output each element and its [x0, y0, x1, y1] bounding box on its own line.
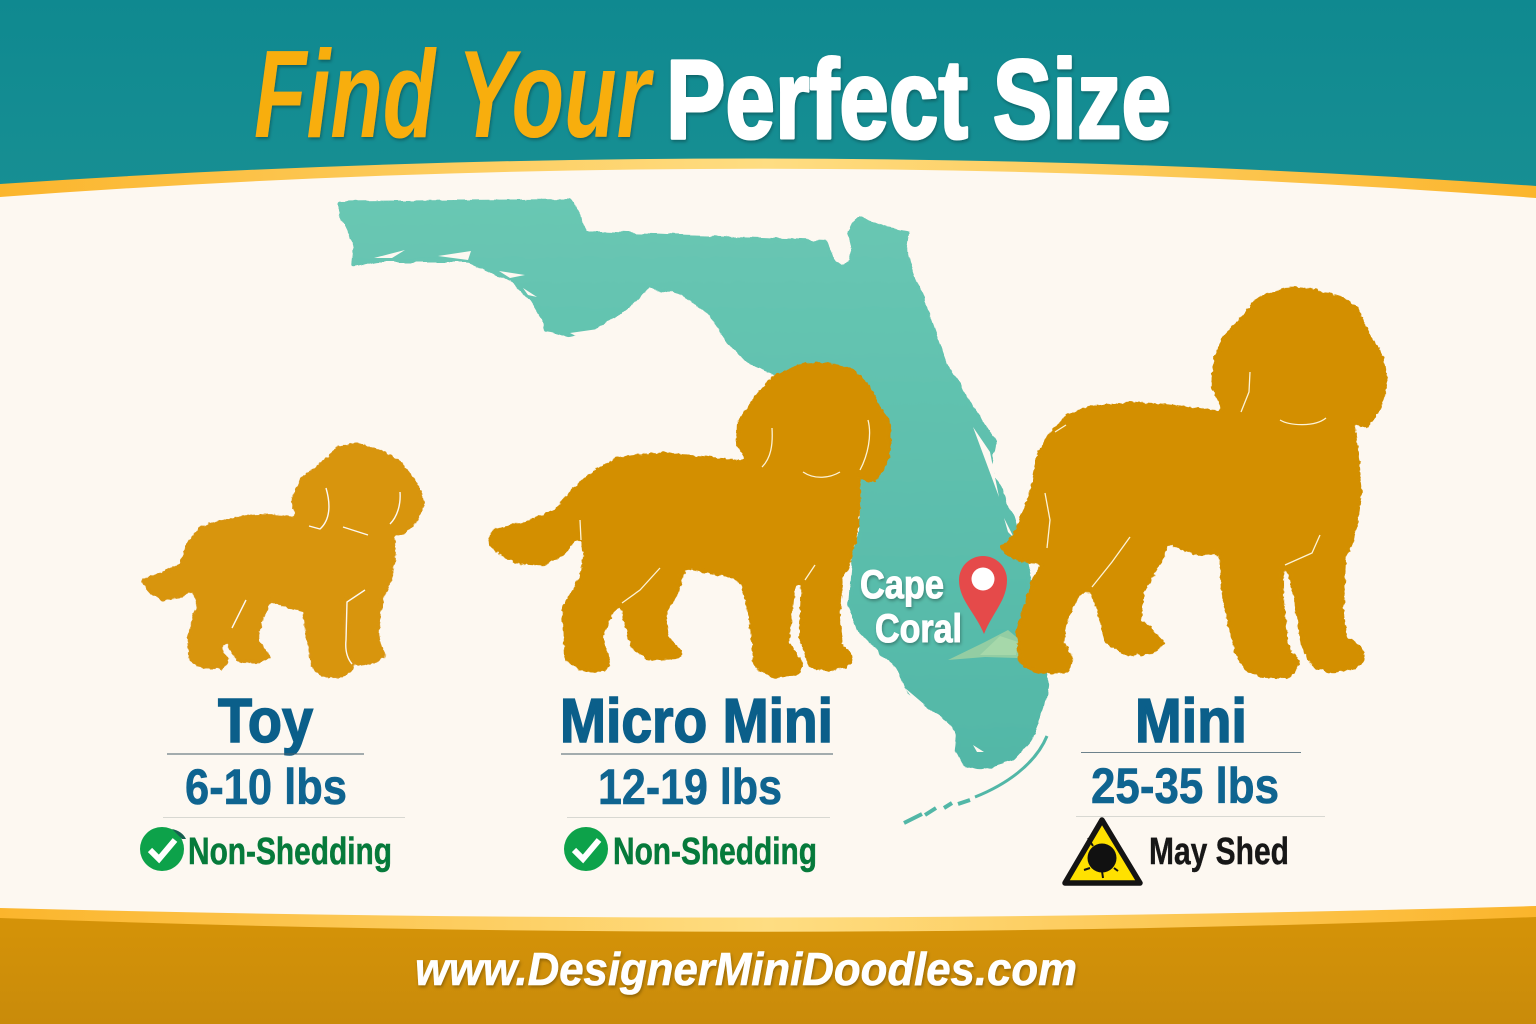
label: Non-Shedding: Non-Shedding — [613, 831, 817, 873]
title: Find Your — [254, 26, 654, 164]
location label: Cape Coral — [860, 563, 962, 651]
icon: green check — [140, 827, 186, 871]
map detail: Lake area — [948, 630, 1020, 660]
map detail: east coast lagoon — [905, 427, 1014, 752]
size: Micro Mini: Micro Mini — [560, 687, 833, 756]
dog: Micro Mini silhouette — [488, 363, 890, 677]
title — [254, 26, 1171, 164]
icon: warning triangle — [1065, 820, 1140, 883]
label: Non-Shedding: Non-Shedding — [188, 831, 392, 873]
size: Toy — [140, 687, 405, 873]
dog: Mini silhouette — [1000, 288, 1387, 677]
location label: Cape Coral: Coral — [875, 607, 962, 651]
website url: www.DesignerMiniDoodles.com — [415, 943, 1077, 995]
size: Micro Mini: 12-19 lbs — [598, 759, 782, 815]
icon: green check — [564, 827, 608, 871]
map: Florida — [337, 199, 1049, 823]
size: Mini: Mini — [1135, 687, 1247, 756]
size: Toy: Toy — [218, 687, 313, 756]
label: May Shed: May Shed — [1149, 831, 1289, 873]
size: Toy: 6-10 lbs — [185, 759, 347, 815]
title: Perfect Size — [666, 37, 1171, 162]
footer band — [0, 906, 1536, 1024]
map detail: panhandle inlets — [374, 250, 722, 338]
size: Micro Mini — [560, 687, 833, 873]
map detail: Florida Keys — [904, 736, 1047, 823]
size: Mini — [1065, 687, 1325, 883]
header band — [0, 0, 1536, 198]
location label: Cape Coral: Cape — [860, 563, 944, 607]
icon: map pin — [959, 556, 1007, 634]
size: Mini: 25-35 lbs — [1091, 758, 1279, 814]
dog: Toy silhouette — [142, 443, 424, 677]
